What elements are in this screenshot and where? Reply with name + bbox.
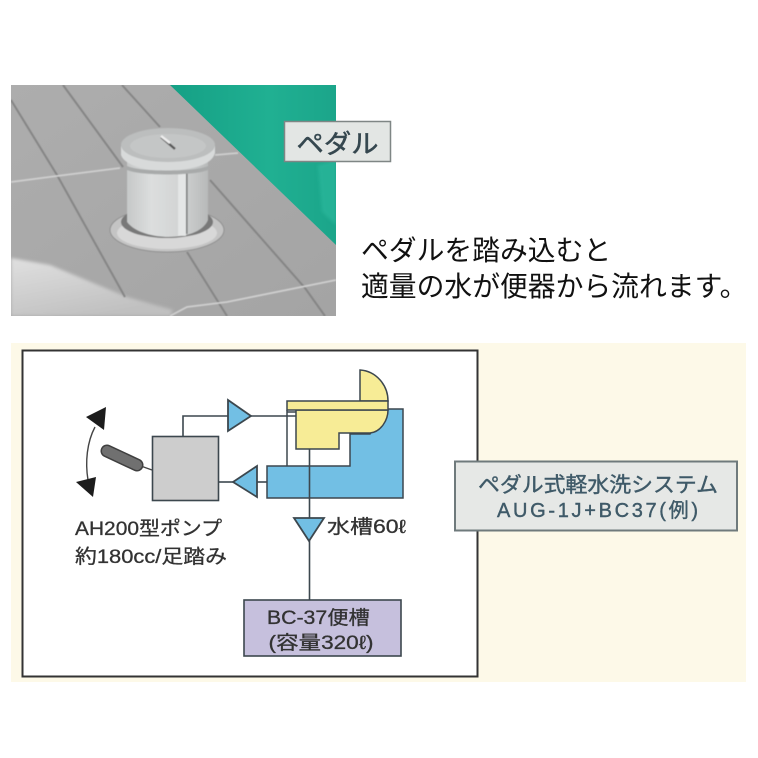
pump label: 約180cc/足踏み xyxy=(75,546,227,568)
pump box xyxy=(152,436,218,500)
label: system name: AUG-1J+BC37(例) xyxy=(497,499,698,522)
floor grooves xyxy=(11,85,325,316)
toilet tank box: (容量320ℓ) xyxy=(268,632,374,654)
valve triangles xyxy=(228,400,257,497)
label: system name xyxy=(455,462,737,530)
tank label: 水槽60ℓ xyxy=(327,516,406,538)
icon: foot pedal xyxy=(107,451,152,470)
icon: pedal swing arrow xyxy=(76,407,106,497)
label: pedal: ペダル xyxy=(296,129,378,159)
water tank xyxy=(267,409,403,498)
photo: pedal on floor xyxy=(11,85,336,316)
label: pedal xyxy=(284,122,390,162)
pedal base ring xyxy=(110,214,224,253)
drain pipe xyxy=(308,449,310,600)
toilet tank box: BC-37便槽 xyxy=(267,607,370,629)
drain valve xyxy=(294,518,324,541)
pump label: AH200型ポンプ xyxy=(75,518,223,540)
green wall xyxy=(170,85,336,245)
caption text: 適量の水が便器から流れます。 xyxy=(361,271,747,302)
panel: cream background xyxy=(11,343,746,682)
toilet bowl xyxy=(287,370,388,466)
lit floor area xyxy=(11,258,173,316)
pipes xyxy=(183,416,296,482)
toilet tank box xyxy=(244,600,401,656)
label: system name: ペダル式軽水洗システム xyxy=(478,474,718,497)
panel: system diagram xyxy=(22,350,478,676)
caption text: ペダルを踏み込むと xyxy=(361,235,611,266)
pedal cylinder xyxy=(121,128,215,237)
